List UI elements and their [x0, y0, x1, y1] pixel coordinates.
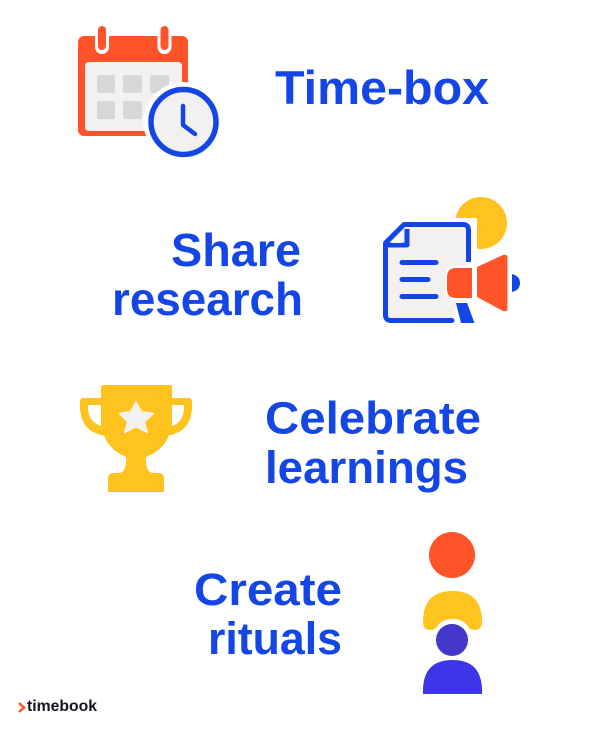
icon: trophy	[80, 385, 192, 492]
logo: timebook: timebook	[27, 698, 97, 715]
heading: Create rituals: rituals	[208, 613, 342, 664]
heading: Share research: Share	[171, 224, 301, 276]
heading: Celebrate learnings: Celebrate	[265, 392, 481, 444]
heading: Share research: research	[112, 273, 303, 325]
heading: Create rituals	[194, 564, 342, 664]
heading: Time-box: Time-box	[275, 61, 489, 114]
heading: Share research	[112, 224, 303, 325]
heading: Celebrate learnings	[265, 392, 481, 493]
heading: Celebrate learnings: learnings	[265, 442, 468, 493]
icon: people rituals	[423, 532, 482, 694]
icon: calendar with clock	[78, 22, 224, 162]
heading: Create rituals: Create	[194, 564, 342, 615]
icon: document with megaphone	[378, 197, 520, 330]
